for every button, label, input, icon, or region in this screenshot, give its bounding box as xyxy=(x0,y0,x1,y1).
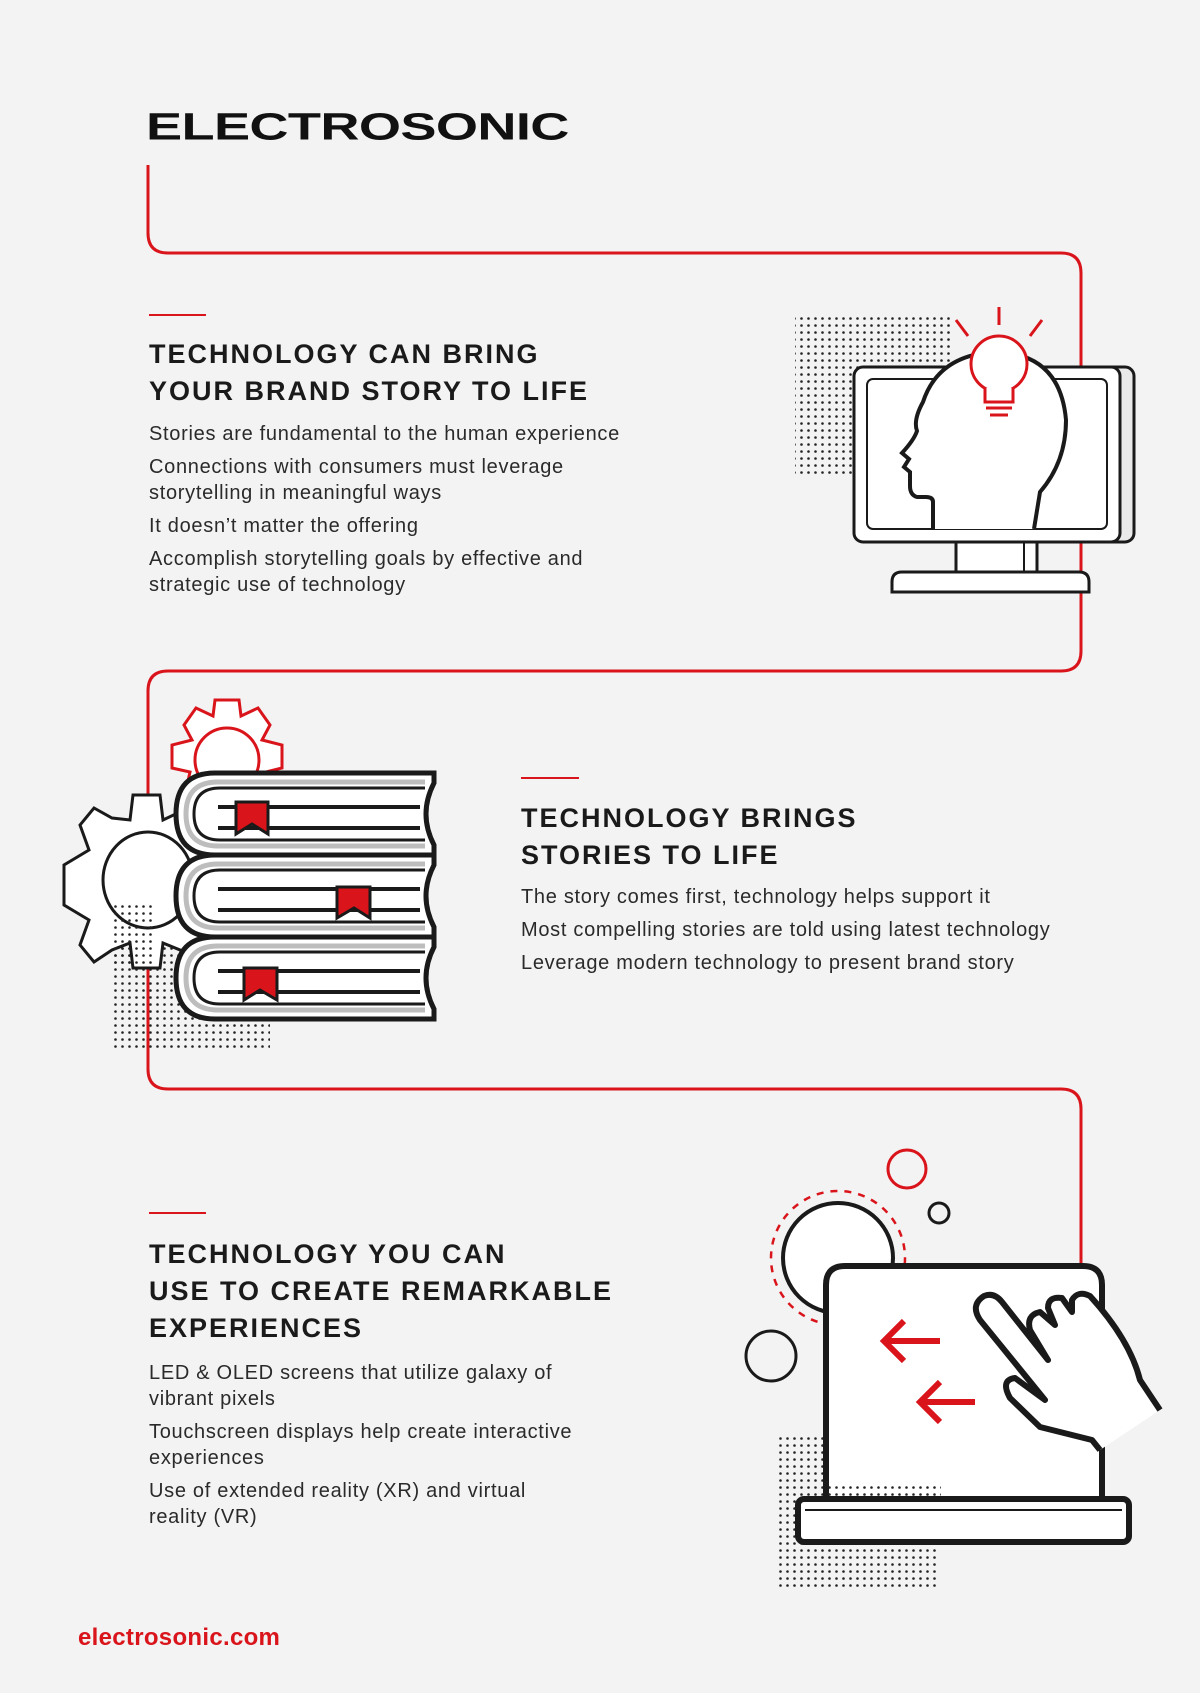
heading: TECHNOLOGY CAN BRING xyxy=(149,339,540,369)
body text: vibrant pixels xyxy=(149,1388,276,1410)
heading: TECHNOLOGY BRINGS xyxy=(521,803,858,833)
logo: ELECTROSONIC xyxy=(146,105,569,147)
body text: Leverage modern technology to present brand story xyxy=(521,952,1014,974)
body text xyxy=(149,423,620,596)
heading: EXPERIENCES xyxy=(149,1313,363,1343)
heading: STORIES TO LIFE xyxy=(521,840,780,870)
red connector path xyxy=(148,165,1081,1290)
heading: YOUR BRAND STORY TO LIFE xyxy=(149,376,589,406)
heading: TECHNOLOGY YOU CAN xyxy=(149,1239,507,1269)
body text: Most compelling stories are told using latest technology xyxy=(521,919,1050,941)
accent line xyxy=(521,777,579,779)
heading: USE TO CREATE REMARKABLE xyxy=(149,1276,613,1306)
icon: gears and stack of books xyxy=(64,700,434,1048)
accent line xyxy=(149,314,206,316)
section 3 xyxy=(149,1212,613,1528)
body text xyxy=(149,1362,572,1528)
heading xyxy=(521,803,858,870)
icon: monitor with head and lightbulb xyxy=(795,307,1134,592)
body text: Accomplish storytelling goals by effective and xyxy=(149,548,583,570)
heading xyxy=(149,1239,613,1343)
body text: strategic use of technology xyxy=(149,574,406,596)
body text: Stories are fundamental to the human experience xyxy=(149,423,620,445)
section 1 xyxy=(149,314,620,596)
section 2 xyxy=(521,777,1050,974)
body text: It doesn’t matter the offering xyxy=(149,515,419,537)
body text: experiences xyxy=(149,1447,265,1469)
icon: touchscreen with hand xyxy=(746,1150,1160,1591)
body text xyxy=(521,886,1050,974)
body text: Connections with consumers must leverage xyxy=(149,456,564,478)
body text: storytelling in meaningful ways xyxy=(149,482,442,504)
body text: reality (VR) xyxy=(149,1506,257,1528)
accent line xyxy=(149,1212,206,1214)
body text: Touchscreen displays help create interactive xyxy=(149,1421,572,1443)
body text: The story comes first, technology helps support it xyxy=(521,886,991,908)
heading xyxy=(149,339,589,406)
body text: LED & OLED screens that utilize galaxy of xyxy=(149,1362,552,1384)
footer url: electrosonic.com xyxy=(78,1624,280,1651)
body text: Use of extended reality (XR) and virtual xyxy=(149,1480,526,1502)
